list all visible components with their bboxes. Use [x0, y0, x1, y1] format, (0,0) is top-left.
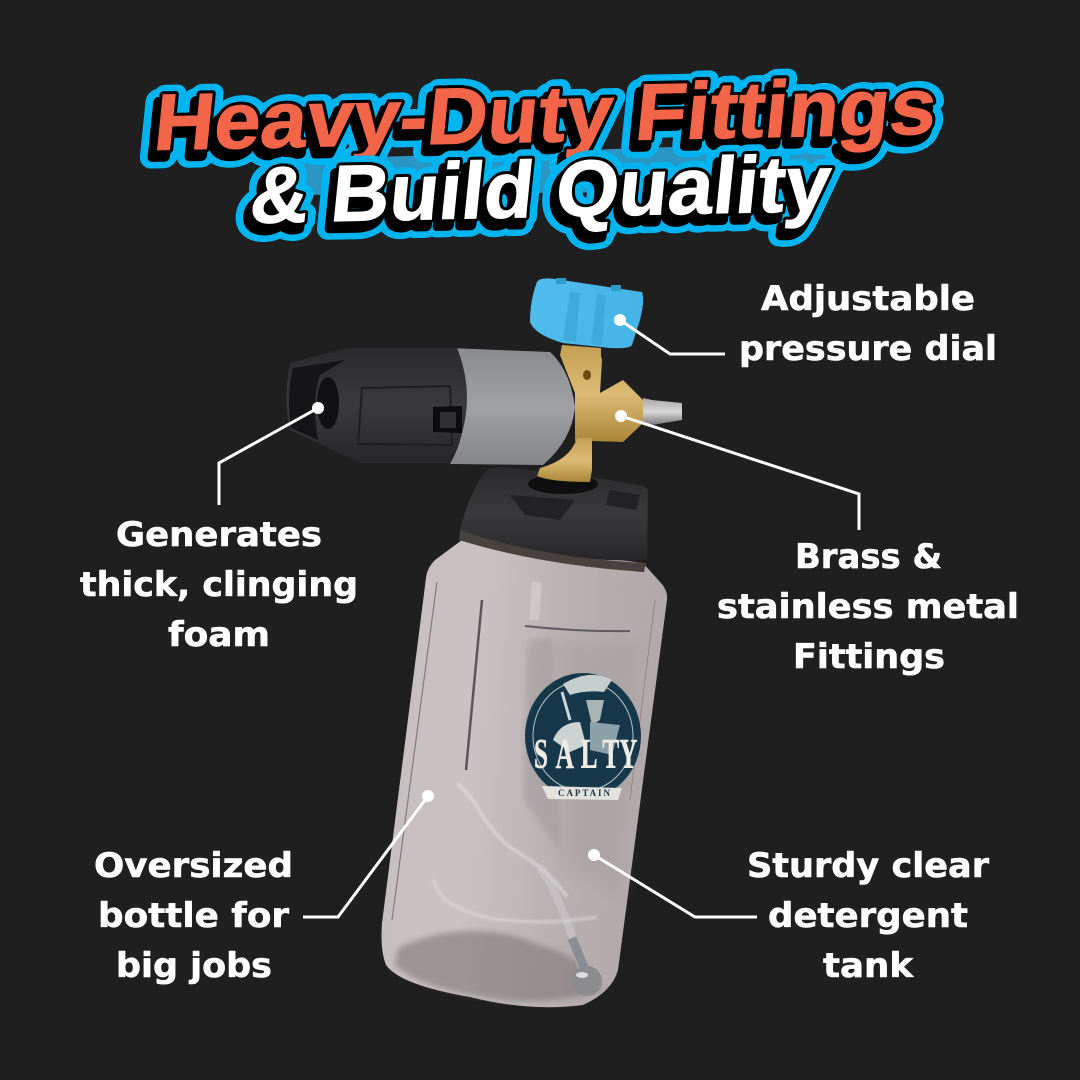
pickup tube [534, 582, 537, 620]
label: detergent tank [747, 846, 989, 986]
leader: pressure dial [614, 314, 725, 354]
label: foam [80, 515, 358, 655]
leader: foam [219, 402, 324, 505]
label: adjustable pressure dial: Adjustable [761, 279, 975, 319]
label: oversized bottle [94, 846, 293, 986]
logo: Salty Captain: CAPTAIN [558, 788, 610, 798]
product: foam cannon [286, 278, 682, 1007]
logo: Salty Captain: L [581, 732, 598, 778]
title line 2: & Build Quality: & Build Quality [246, 139, 836, 241]
label: fittings [717, 537, 1019, 677]
label: oversized bottle: Oversized [94, 846, 293, 886]
logo: Salty Captain: S [534, 732, 548, 778]
label: fittings: stainless metal [717, 587, 1019, 627]
pickup ball [572, 966, 602, 996]
clear detergent bottle [382, 540, 667, 1007]
grey adjuster collar [450, 348, 575, 465]
title line 1: Heavy-Duty Fittings: Heavy-Duty Fittings [150, 62, 941, 168]
label: oversized bottle: bottle for [98, 896, 289, 936]
leader: fittings [615, 410, 859, 530]
label: detergent tank: Sturdy clear [747, 846, 989, 886]
label: foam: foam [168, 615, 270, 655]
title line 1: Heavy-Duty Fittings: Heavy-Duty Fittings [145, 69, 936, 175]
title [145, 62, 942, 248]
leader: detergent tank [588, 849, 757, 917]
title line 2: & Build Quality: & Build Quality [246, 139, 836, 241]
label: foam: thick, clinging [80, 565, 358, 605]
label: detergent tank: tank [823, 946, 914, 986]
title line 2: & Build Quality: & Build Quality [241, 146, 831, 248]
title line 1: Heavy-Duty Fittings: Heavy-Duty Fittings [146, 68, 937, 174]
logo: Salty Captain: Y [619, 732, 637, 778]
stainless quick-connect [643, 398, 682, 425]
brass body [537, 345, 643, 482]
label: fittings: Fittings [793, 637, 945, 677]
title backing band [290, 140, 880, 195]
bottle cap [459, 467, 648, 572]
logo: Salty Captain [525, 673, 641, 800]
label: detergent tank: detergent [768, 896, 968, 936]
label: foam: Generates [116, 515, 322, 555]
logo: Salty Captain: T [602, 732, 619, 778]
title line 2: & Build Quality: & Build Quality [242, 145, 831, 247]
label: oversized bottle: big jobs [116, 946, 272, 986]
title line 1: Heavy-Duty Fittings: Heavy-Duty Fittings [151, 62, 942, 168]
title line 2: & Build Quality: & Build Quality [247, 139, 837, 241]
logo: Salty Captain: A [556, 732, 574, 778]
black foam nozzle [286, 348, 467, 463]
blue pressure dial [530, 278, 643, 348]
label: adjustable pressure dial [739, 279, 997, 369]
title line 1: Heavy-Duty Fittings: Heavy-Duty Fittings [150, 62, 941, 168]
label: fittings: Brass & [795, 537, 942, 577]
leader: oversized bottle [303, 790, 434, 917]
label: adjustable pressure dial: pressure dial [739, 329, 997, 369]
